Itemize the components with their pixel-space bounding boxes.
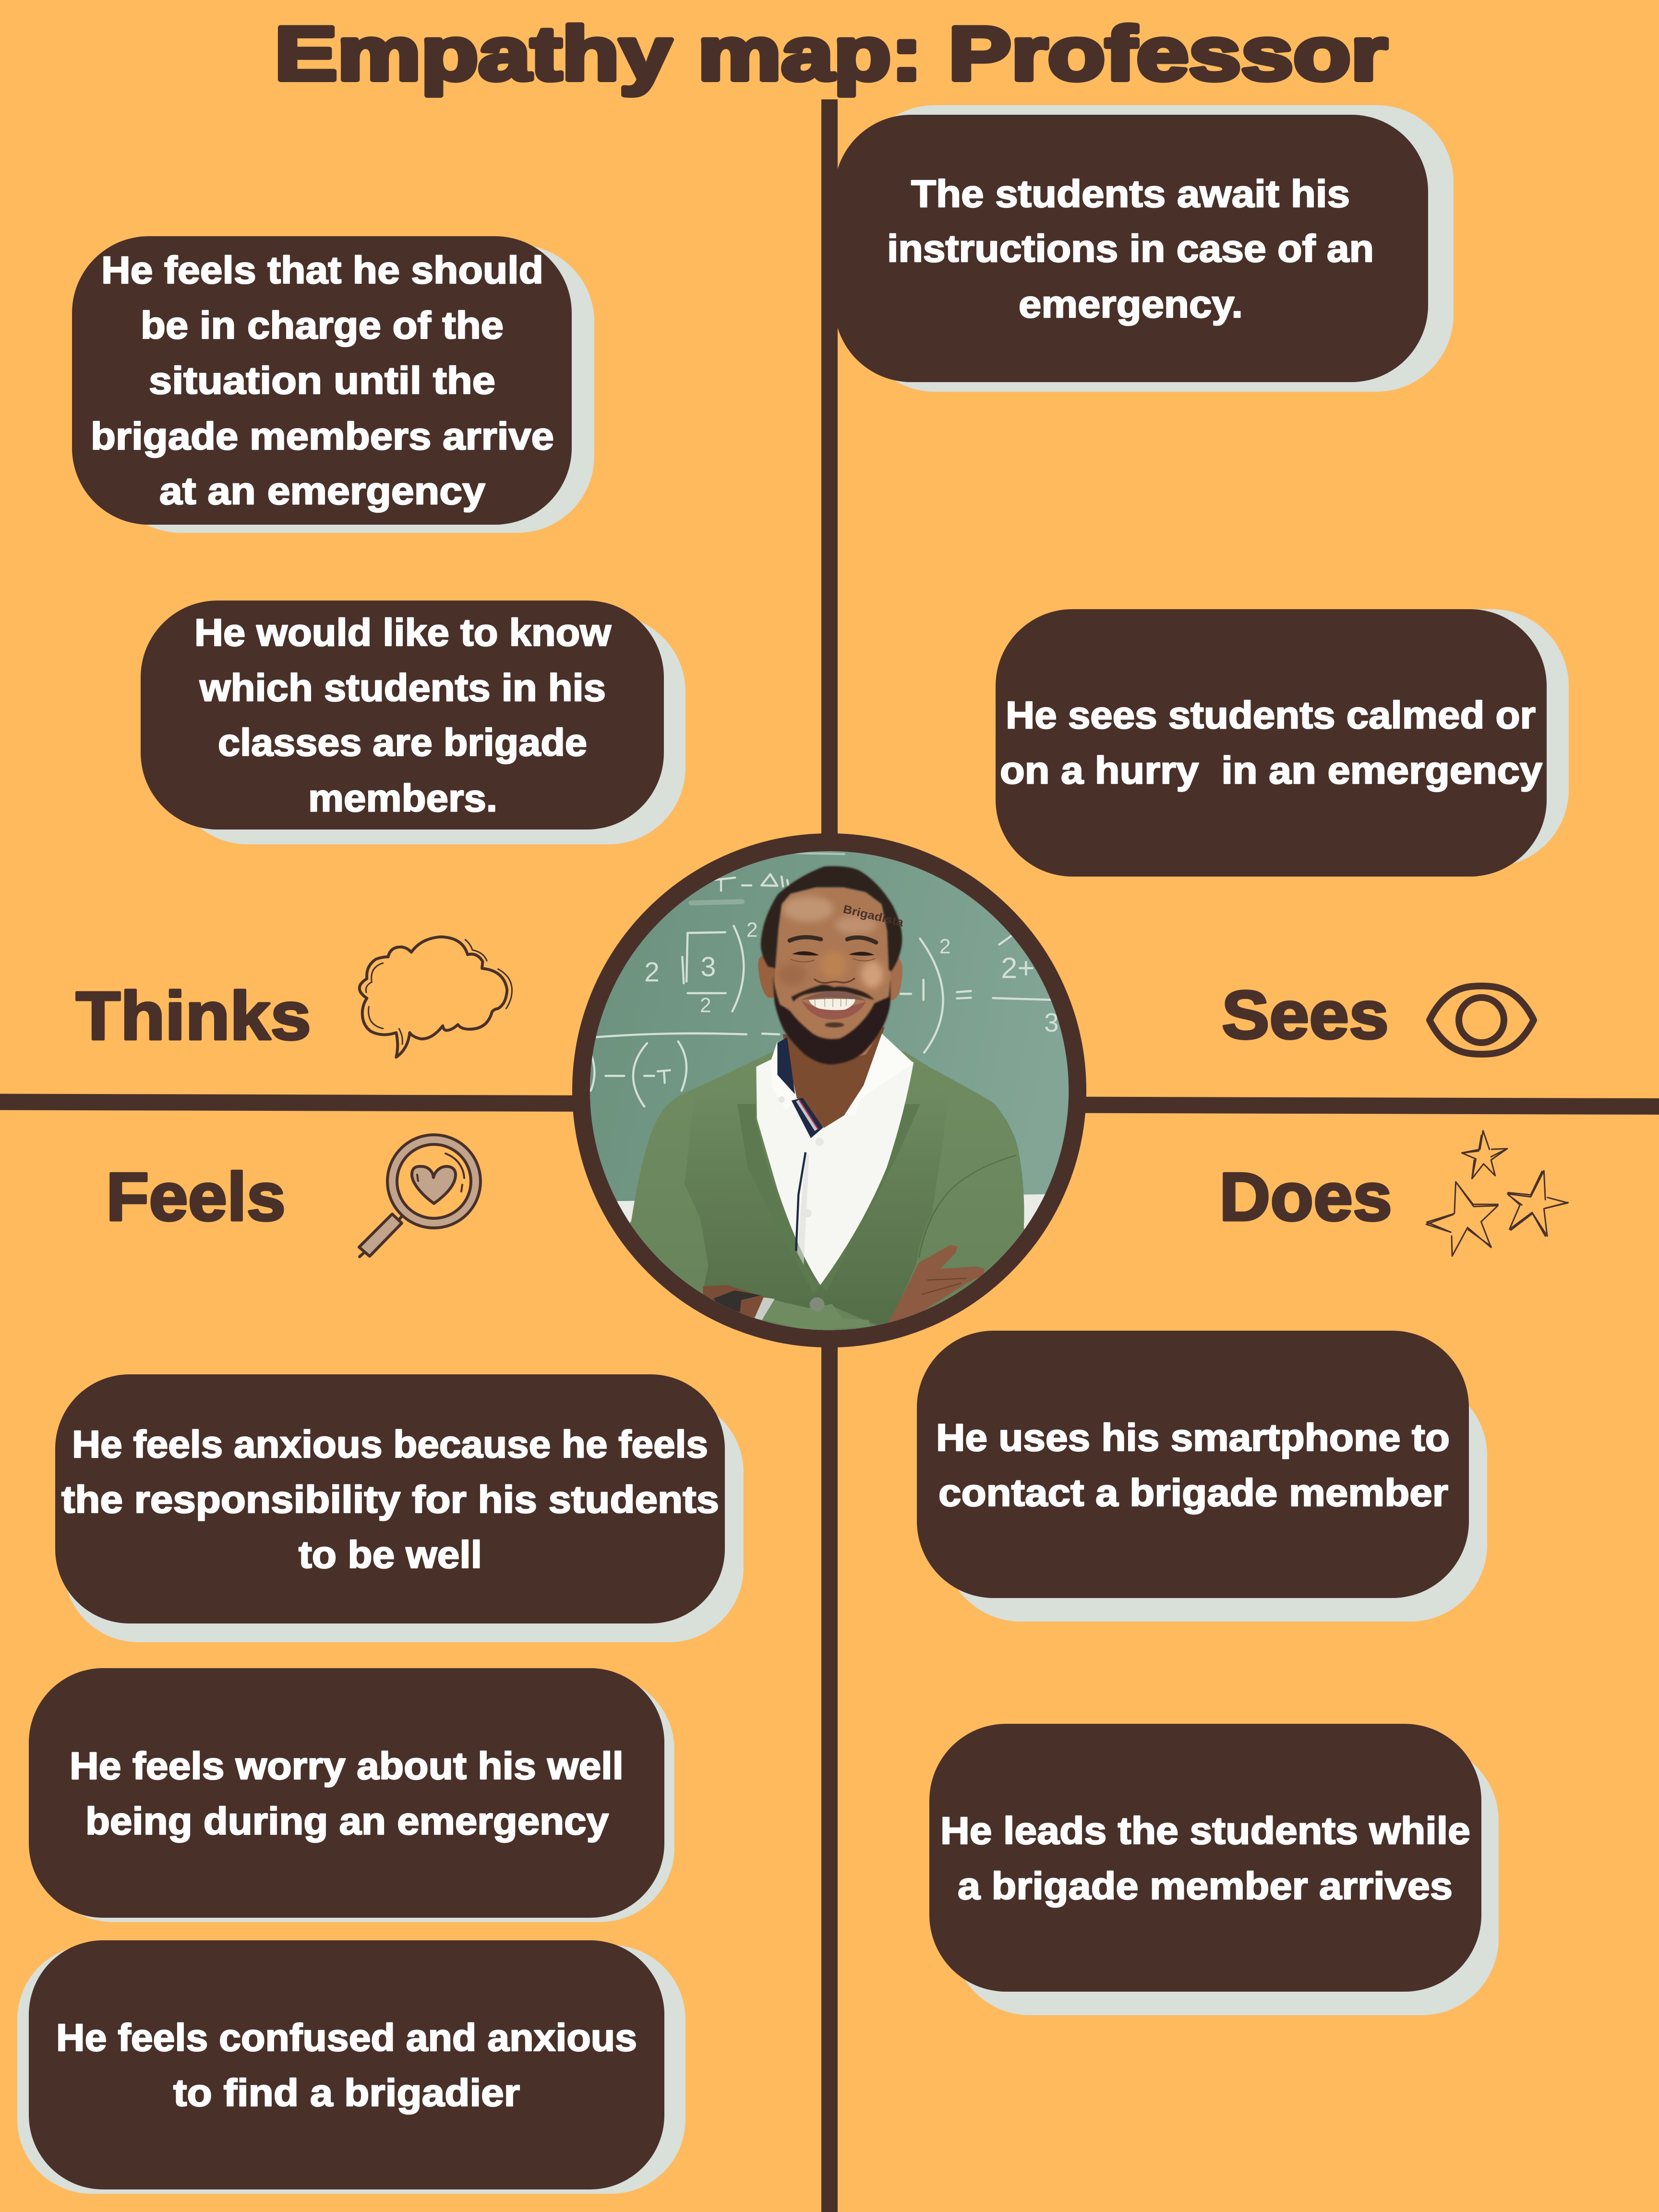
panel: does bubble 2: a brigade member arrives [958,1864,1453,1907]
panel: thinks bubble 2: which students in his [199,666,606,709]
icon: magnifying glass with heart [359,1135,481,1257]
photo illustration [587,848,1073,1344]
collar and placket [777,1037,795,1094]
photo illustration: 2 [700,994,711,1017]
panel: thinks bubble 1: at an emergency [159,469,486,512]
lips and teeth [801,991,866,1001]
panel: thinks bubble 1: situation until the [149,359,495,402]
heading: Feels: Feels [106,1159,286,1235]
panel: feels bubble 1: the responsibility for his students [61,1478,719,1521]
panel: sees bubble 1 [834,105,1454,392]
upper torso [630,1051,1024,1330]
panel: thinks bubble 2: He would like to know [194,611,612,654]
panel: thinks bubble 2: members. [308,777,497,819]
photo illustration: 2 [644,957,660,988]
photo illustration: 3 [1044,1008,1058,1037]
panel: sees bubble 1: The students await his [911,172,1350,215]
icon: three stars [1426,1130,1568,1256]
panel: feels bubble 2: He feels worry about his well [70,1744,624,1787]
panel: does bubble 2: He leads the students while [940,1809,1470,1852]
panel: sees bubble 2: on a hurry in an emergency [1000,749,1543,792]
head [758,866,905,1064]
heading: Thinks: Thinks [76,978,311,1054]
heading: Does: Does [1219,1159,1392,1235]
panel: feels bubble 1: He feels anxious because he feels [72,1423,708,1466]
panel: thinks bubble 1 [72,236,594,533]
brows [790,937,876,942]
panel: sees bubble 1: instructions in case of an [887,227,1374,270]
panel: feels bubble 1: to be well [299,1533,482,1576]
panel: feels bubble 2: being during an emergency [85,1800,609,1842]
white shirt [756,1034,914,1285]
icon: thought cloud [360,937,512,1057]
panel: sees bubble 1: emergency. [1019,283,1243,325]
beard [773,976,890,1064]
panel: thinks bubble 1: be in charge of the [141,304,504,347]
face [774,887,890,1062]
panel: does bubble 1: contact a brigade member [938,1471,1448,1514]
panel: feels bubble 3 [17,1940,685,2194]
icon: eye [1430,986,1534,1054]
neck [782,1027,885,1128]
panel: sees bubble 2 [996,609,1569,877]
title: Empathy map: Professor [275,12,1387,96]
nose shadow [815,978,854,983]
panel: thinks bubble 1: He feels that he should [101,249,543,291]
photo illustration: 2+ [1001,951,1034,985]
panel: thinks bubble 2 [141,601,685,844]
panel: does bubble 1: He uses his smartphone to [936,1416,1450,1459]
hair [761,866,902,971]
ears [758,955,775,998]
panel: feels bubble 3: to find a brigadier [173,2071,520,2114]
eyes [792,951,819,955]
panel: thinks bubble 2: classes are brigade [218,721,587,764]
panel: feels bubble 1 [55,1374,744,1642]
lower cardigan details [685,1088,1016,1330]
panel: thinks bubble 1: brigade members arrive [91,415,554,457]
photo illustration: 2 [746,919,757,942]
photo illustration: 3 [700,952,716,983]
panel: feels bubble 3: He feels confused and anxious [56,2016,637,2059]
photo: smiling professor in front of a chalkboard [581,842,1077,1344]
panel: feels bubble 2 [29,1668,674,1922]
panel: does bubble 1 [917,1331,1487,1622]
heading: Sees: Sees [1222,977,1389,1053]
panel: does bubble 2 [929,1724,1499,2015]
photo frame ring [581,842,1077,1338]
photo illustration: 2 [939,935,950,958]
forehead label: Brigadista [842,903,905,929]
panel: sees bubble 2: He sees students calmed or [1006,694,1536,736]
arms, watch and hand [703,1245,984,1331]
